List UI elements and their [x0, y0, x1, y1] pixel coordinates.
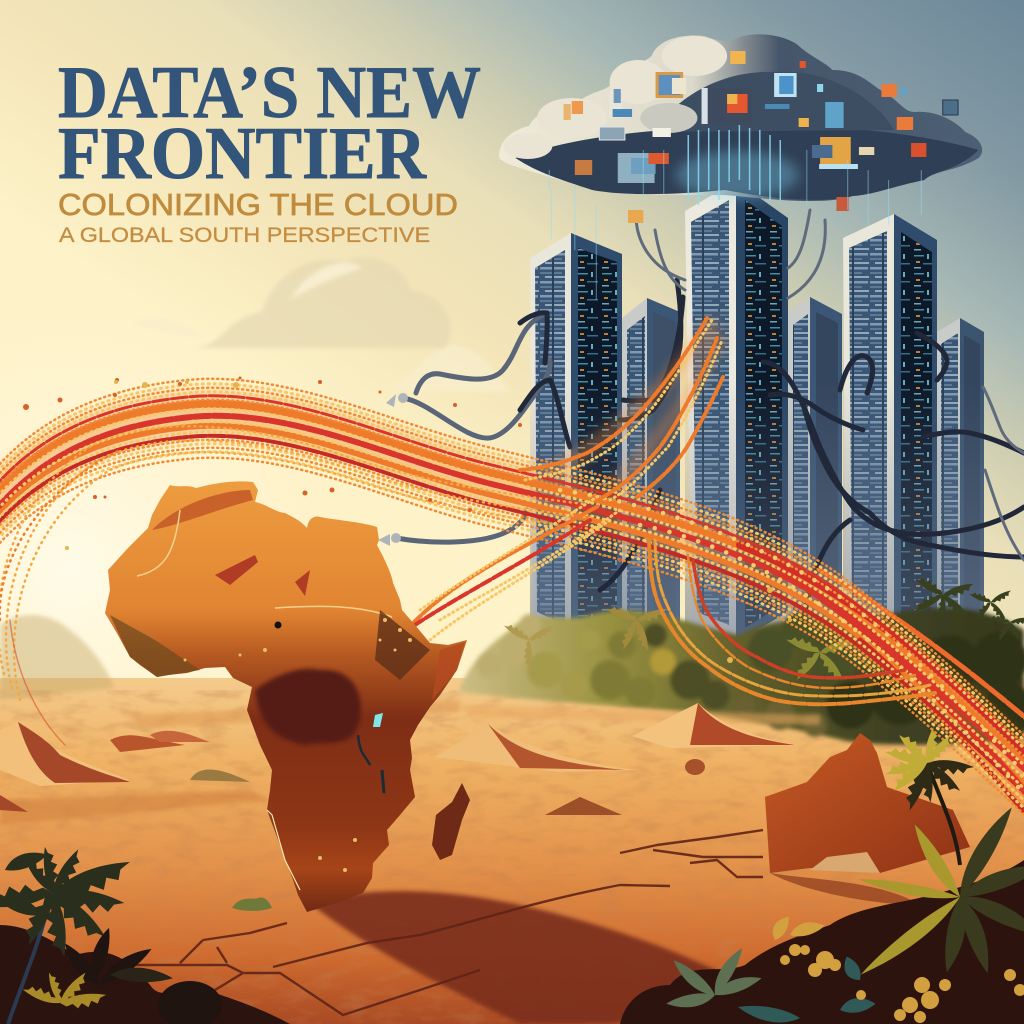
small shrub — [232, 897, 272, 911]
dune right — [632, 703, 800, 748]
tower: front right — [843, 214, 937, 625]
cracked earth and shadows — [133, 830, 763, 1024]
tower: front centre — [685, 181, 788, 642]
connector plugs — [378, 393, 408, 546]
subtitle: COLONIZING THE CLOUD — [58, 187, 458, 222]
desert dunes — [0, 700, 820, 825]
tagline: A GLOBAL SOUTH PERSPECTIVE — [59, 224, 430, 247]
distant vegetation left — [0, 615, 115, 700]
spray particles — [23, 376, 792, 663]
grey cables on the left — [396, 313, 550, 542]
cloud mid shadow — [664, 72, 894, 132]
palm tree right — [883, 727, 974, 865]
yellow fern — [21, 970, 108, 1012]
cloud body — [499, 34, 982, 201]
dark undergrowth — [620, 860, 1024, 1024]
dune centre — [435, 724, 640, 772]
lower dotted arcs — [0, 426, 600, 700]
dark undergrowth — [0, 925, 290, 1024]
cables — [378, 210, 1024, 640]
rock formation right — [765, 733, 970, 905]
server towers — [530, 181, 984, 642]
title block — [58, 52, 481, 247]
data tiles — [564, 51, 958, 223]
madagascar — [432, 783, 470, 860]
background clouds — [130, 257, 510, 392]
glow at tower top — [676, 151, 799, 199]
lower loops — [649, 540, 935, 704]
data streams — [0, 318, 1024, 830]
dune left — [0, 722, 130, 786]
main band dotted strands — [0, 384, 1024, 823]
sky background — [0, 0, 1024, 720]
palm fronds — [0, 845, 136, 959]
continent outline — [105, 481, 467, 912]
ground — [0, 678, 1024, 1024]
big palm leaves — [940, 802, 1024, 975]
africa shadow — [312, 891, 745, 1024]
map of africa — [105, 481, 467, 912]
tower: front left — [530, 233, 622, 640]
tower: back centre — [788, 297, 842, 640]
main title — [58, 52, 481, 195]
bush masses — [459, 608, 1024, 745]
tower lower haze — [530, 380, 984, 642]
tower: back left — [622, 298, 680, 640]
tower: back right — [937, 318, 984, 620]
foreground foliage left — [0, 845, 290, 1024]
surface detail — [110, 490, 465, 890]
stream glow — [0, 325, 1024, 785]
main title: FRONTIER — [58, 113, 427, 195]
main band right widening — [740, 545, 1024, 830]
palm crowns — [503, 573, 1024, 684]
congo dark patch — [255, 669, 361, 745]
streams to towers — [405, 318, 723, 640]
cracks — [133, 830, 763, 1015]
data rain — [549, 125, 921, 300]
big gold sparks — [560, 490, 1024, 800]
foreground foliage right — [620, 802, 1024, 1024]
cloud dark underside — [516, 126, 979, 200]
lower left leaves — [665, 944, 763, 1011]
background jungle — [459, 573, 1024, 745]
main band solid strands — [0, 396, 1024, 807]
dark cables — [520, 280, 1024, 640]
cloud with data tiles — [499, 34, 982, 300]
ground mottling — [0, 690, 1024, 1024]
main title: DATA’S NEW — [58, 52, 481, 134]
cloud white puffs — [503, 36, 727, 159]
